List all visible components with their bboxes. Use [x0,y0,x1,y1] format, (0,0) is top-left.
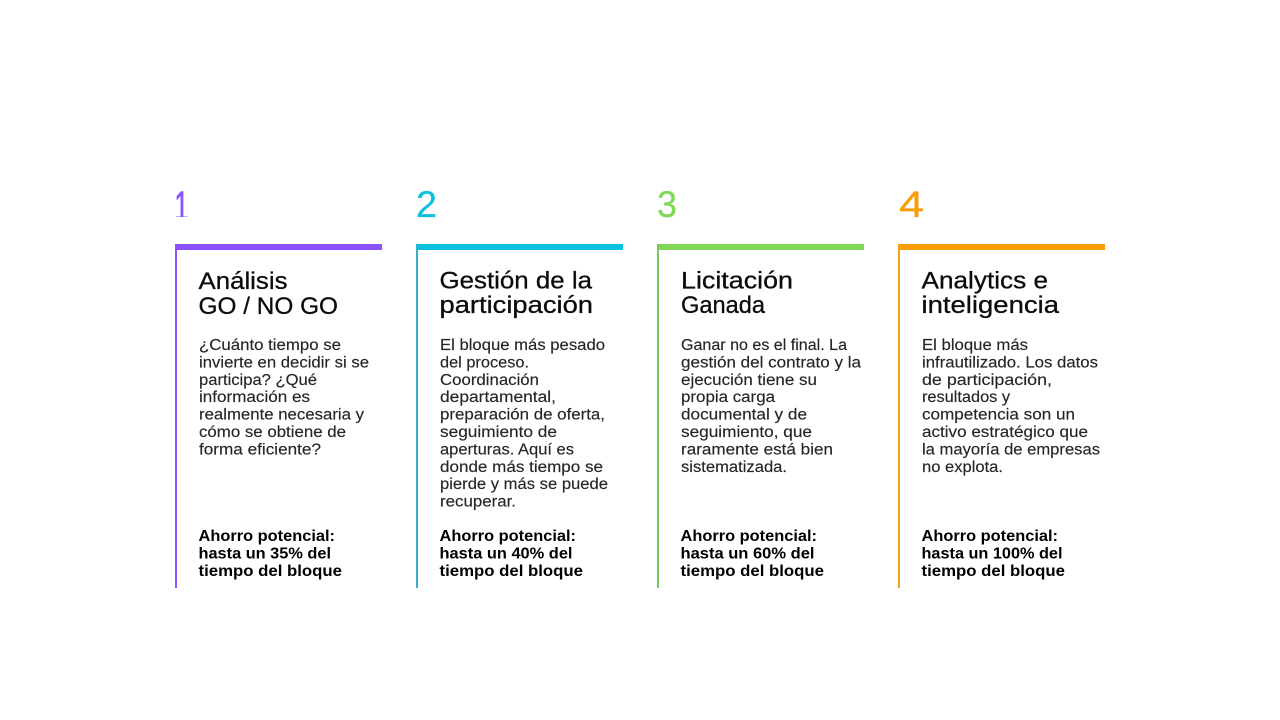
body text 3: ejecución tiene su [681,372,817,389]
savings 1: hasta un 35% del [198,545,331,562]
body text 2: El bloque más pesado [440,337,605,354]
savings 2: tiempo del bloque [440,563,583,580]
top bar 4 [898,244,1105,250]
heading 1 [198,268,338,320]
body text 4: de participación, [922,372,1052,389]
body text 4: El bloque más [922,337,1028,354]
heading 2: Gestión de la [440,268,592,294]
heading 3 [681,268,793,319]
number 3: 3 [657,184,677,225]
body text 2: pierde y más se puede [440,476,608,493]
heading 4 [922,268,1059,319]
body text 2: preparación de oferta, [440,407,605,424]
body text 1: información es [199,389,310,406]
body text 2: del proceso. [440,354,529,371]
body text 1: realmente necesaria y [199,407,364,424]
body text 4: no explota. [922,459,1003,476]
top bar 1 [175,244,382,250]
body text 3: Ganar no es el final. La [681,337,847,354]
body text 4: la mayoría de empresas [922,441,1100,458]
left bar 2 [416,244,418,588]
left bar 4 [898,244,900,588]
body text 2: departamental, [440,389,556,406]
number 4: 4 [899,184,924,225]
savings 2: hasta un 40% del [440,545,572,562]
heading 4: inteligencia [922,292,1059,319]
savings 1: Ahorro potencial: [198,528,335,545]
body text 3: raramente está bien [681,441,833,458]
savings 4: tiempo del bloque [922,563,1065,580]
heading 4: Analytics e [922,268,1048,294]
left bar 3 [657,244,659,588]
body text 1: invierte en decidir si se [199,354,369,371]
body text 2: recuperar. [440,494,516,511]
heading 1: Análisis [198,268,288,295]
body text 4 [922,337,1100,476]
body text 1 [199,337,369,458]
heading 3: Ganada [681,292,765,319]
body text 1: participa? ¿Qué [199,372,317,389]
body text 4: infrautilizado. Los datos [922,354,1098,371]
body text 4: activo estratégico que [922,424,1088,441]
body text 3: sistematizada. [681,459,787,476]
top bar 2 [416,244,623,250]
savings 3: tiempo del bloque [680,563,824,580]
savings 2: Ahorro potencial: [440,528,576,545]
body text 1: cómo se obtiene de [199,424,346,441]
body text 2 [440,337,608,511]
panel: bloque 4 [898,184,1105,588]
panel: bloque 3 [657,184,864,588]
savings 4: Ahorro potencial: [922,528,1058,545]
body text 2: donde más tiempo se [440,459,603,476]
number 2: 2 [416,184,437,225]
top bar 3 [657,244,864,250]
savings 4 [922,528,1065,580]
number 1: 1 [174,183,188,229]
body text 3: seguimiento, que [681,424,812,441]
body text 1: ¿Cuánto tiempo se [199,337,341,354]
body text 4: resultados y [922,389,1010,406]
body text 3: documental y de [681,407,807,424]
savings 3 [680,528,824,580]
heading 2: participación [440,292,593,319]
savings 4: hasta un 100% del [922,545,1062,562]
body text 2: aperturas. Aquí es [440,441,574,458]
heading 2 [440,268,593,319]
panel: bloque 1 [174,183,382,588]
body text 3: gestión del contrato y la [681,354,861,371]
body text 4: competencia son un [922,407,1075,424]
body text 3 [681,337,861,476]
body text 2: Coordinación [440,372,539,389]
savings 3: hasta un 60% del [680,545,814,562]
body text 3: propia carga [681,389,775,406]
left bar 1 [175,244,177,588]
body text 1: forma eficiente? [199,441,321,458]
panel: bloque 2 [416,184,623,588]
heading 3: Licitación [681,268,793,294]
savings 2 [440,528,583,580]
body text 2: seguimiento de [440,424,557,441]
savings 1 [198,528,342,580]
savings 1: tiempo del bloque [198,563,342,580]
heading 1: GO / NO GO [198,293,338,320]
savings 3: Ahorro potencial: [680,528,817,545]
